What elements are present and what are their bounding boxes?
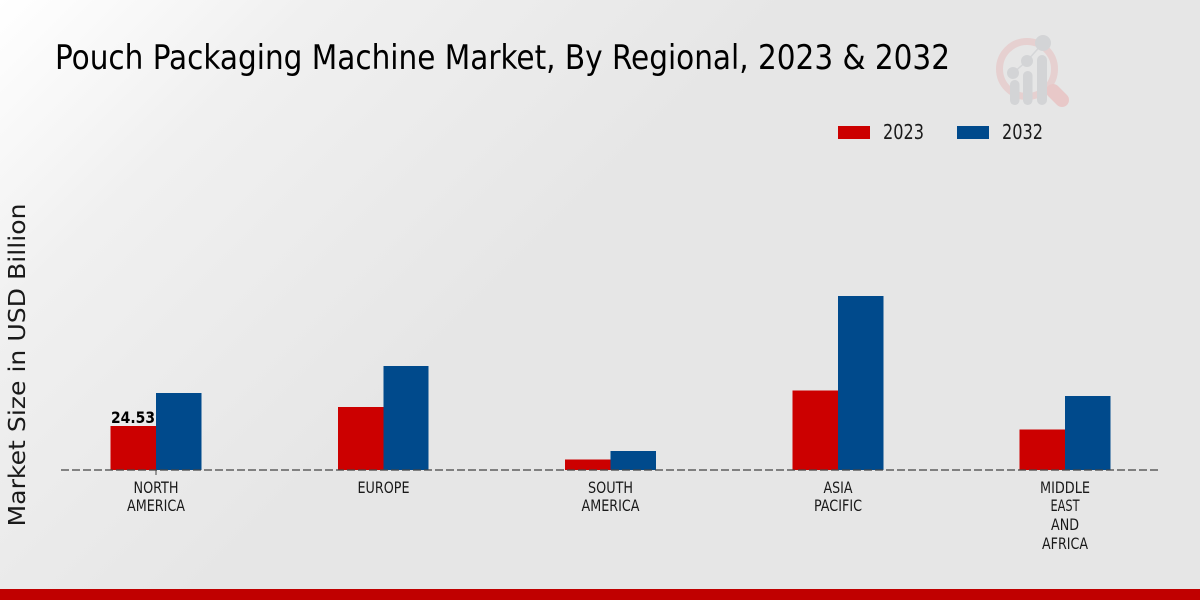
- x label: Middle East and Africa: AND: [1051, 515, 1079, 534]
- y axis label: Market Size in USD Billion: [5, 204, 31, 526]
- data label: 24.53: 24.53: [111, 408, 155, 427]
- x label: North America: AMERICA: [127, 496, 185, 515]
- bars: Europe: [338, 366, 428, 470]
- x label: Europe: EUROPE: [358, 478, 410, 497]
- legend: [838, 120, 1043, 144]
- legend item: 2023: 2023: [883, 120, 924, 144]
- bars: Middle East and Africa: [1020, 396, 1110, 470]
- x label: Asia Pacific: PACIFIC: [814, 496, 862, 515]
- icon: watermark logo: [1000, 35, 1062, 105]
- bars: Asia Pacific: [792, 296, 884, 470]
- footer bar: [0, 589, 1200, 600]
- legend item: 2032: 2032: [1002, 120, 1043, 144]
- x label: Asia Pacific: ASIA: [824, 478, 853, 497]
- x label: South America: AMERICA: [582, 496, 640, 515]
- bars: North America: [110, 393, 202, 470]
- x label: Middle East and Africa: MIDDLE: [1040, 478, 1090, 497]
- title: Pouch Packaging Machine Market, By Regional, 2023 & 2032: [55, 38, 950, 78]
- x label: North America: NORTH: [134, 478, 178, 497]
- x label: South America: SOUTH: [588, 478, 633, 497]
- bars: South America: [565, 451, 656, 470]
- bar chart: [61, 296, 1160, 475]
- legend item: 2023: [838, 120, 924, 144]
- legend item: 2032: [957, 120, 1043, 144]
- x label: Middle East and Africa: AFRICA: [1042, 534, 1088, 553]
- x label: Middle East and Africa: EAST: [1050, 496, 1080, 515]
